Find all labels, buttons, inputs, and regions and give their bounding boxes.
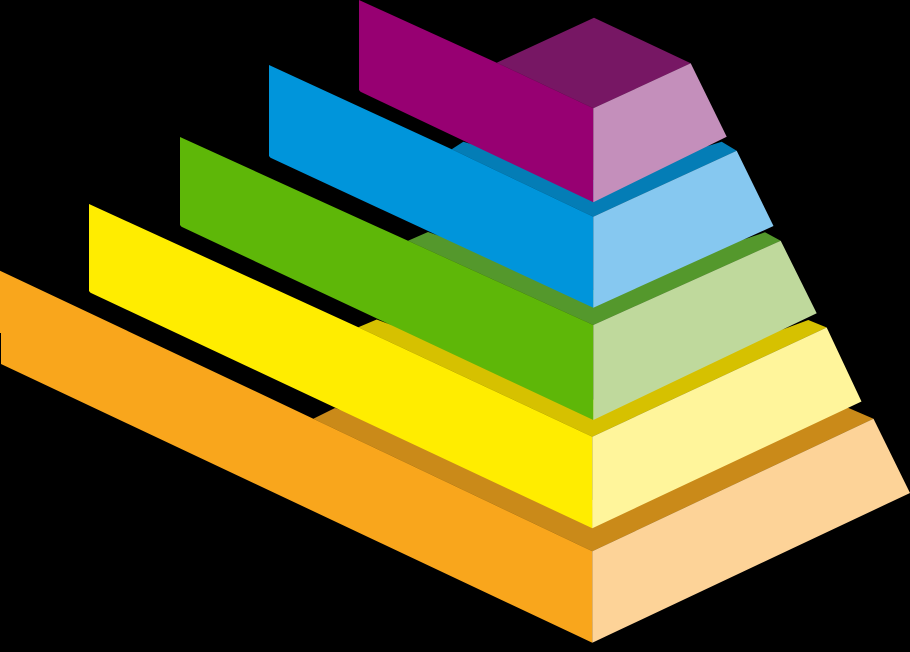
layer: purple top [359, 0, 727, 202]
layer: blue [269, 65, 774, 308]
layer: orange base [0, 271, 910, 643]
layer: yellow [89, 204, 862, 528]
layer: green [180, 137, 817, 420]
